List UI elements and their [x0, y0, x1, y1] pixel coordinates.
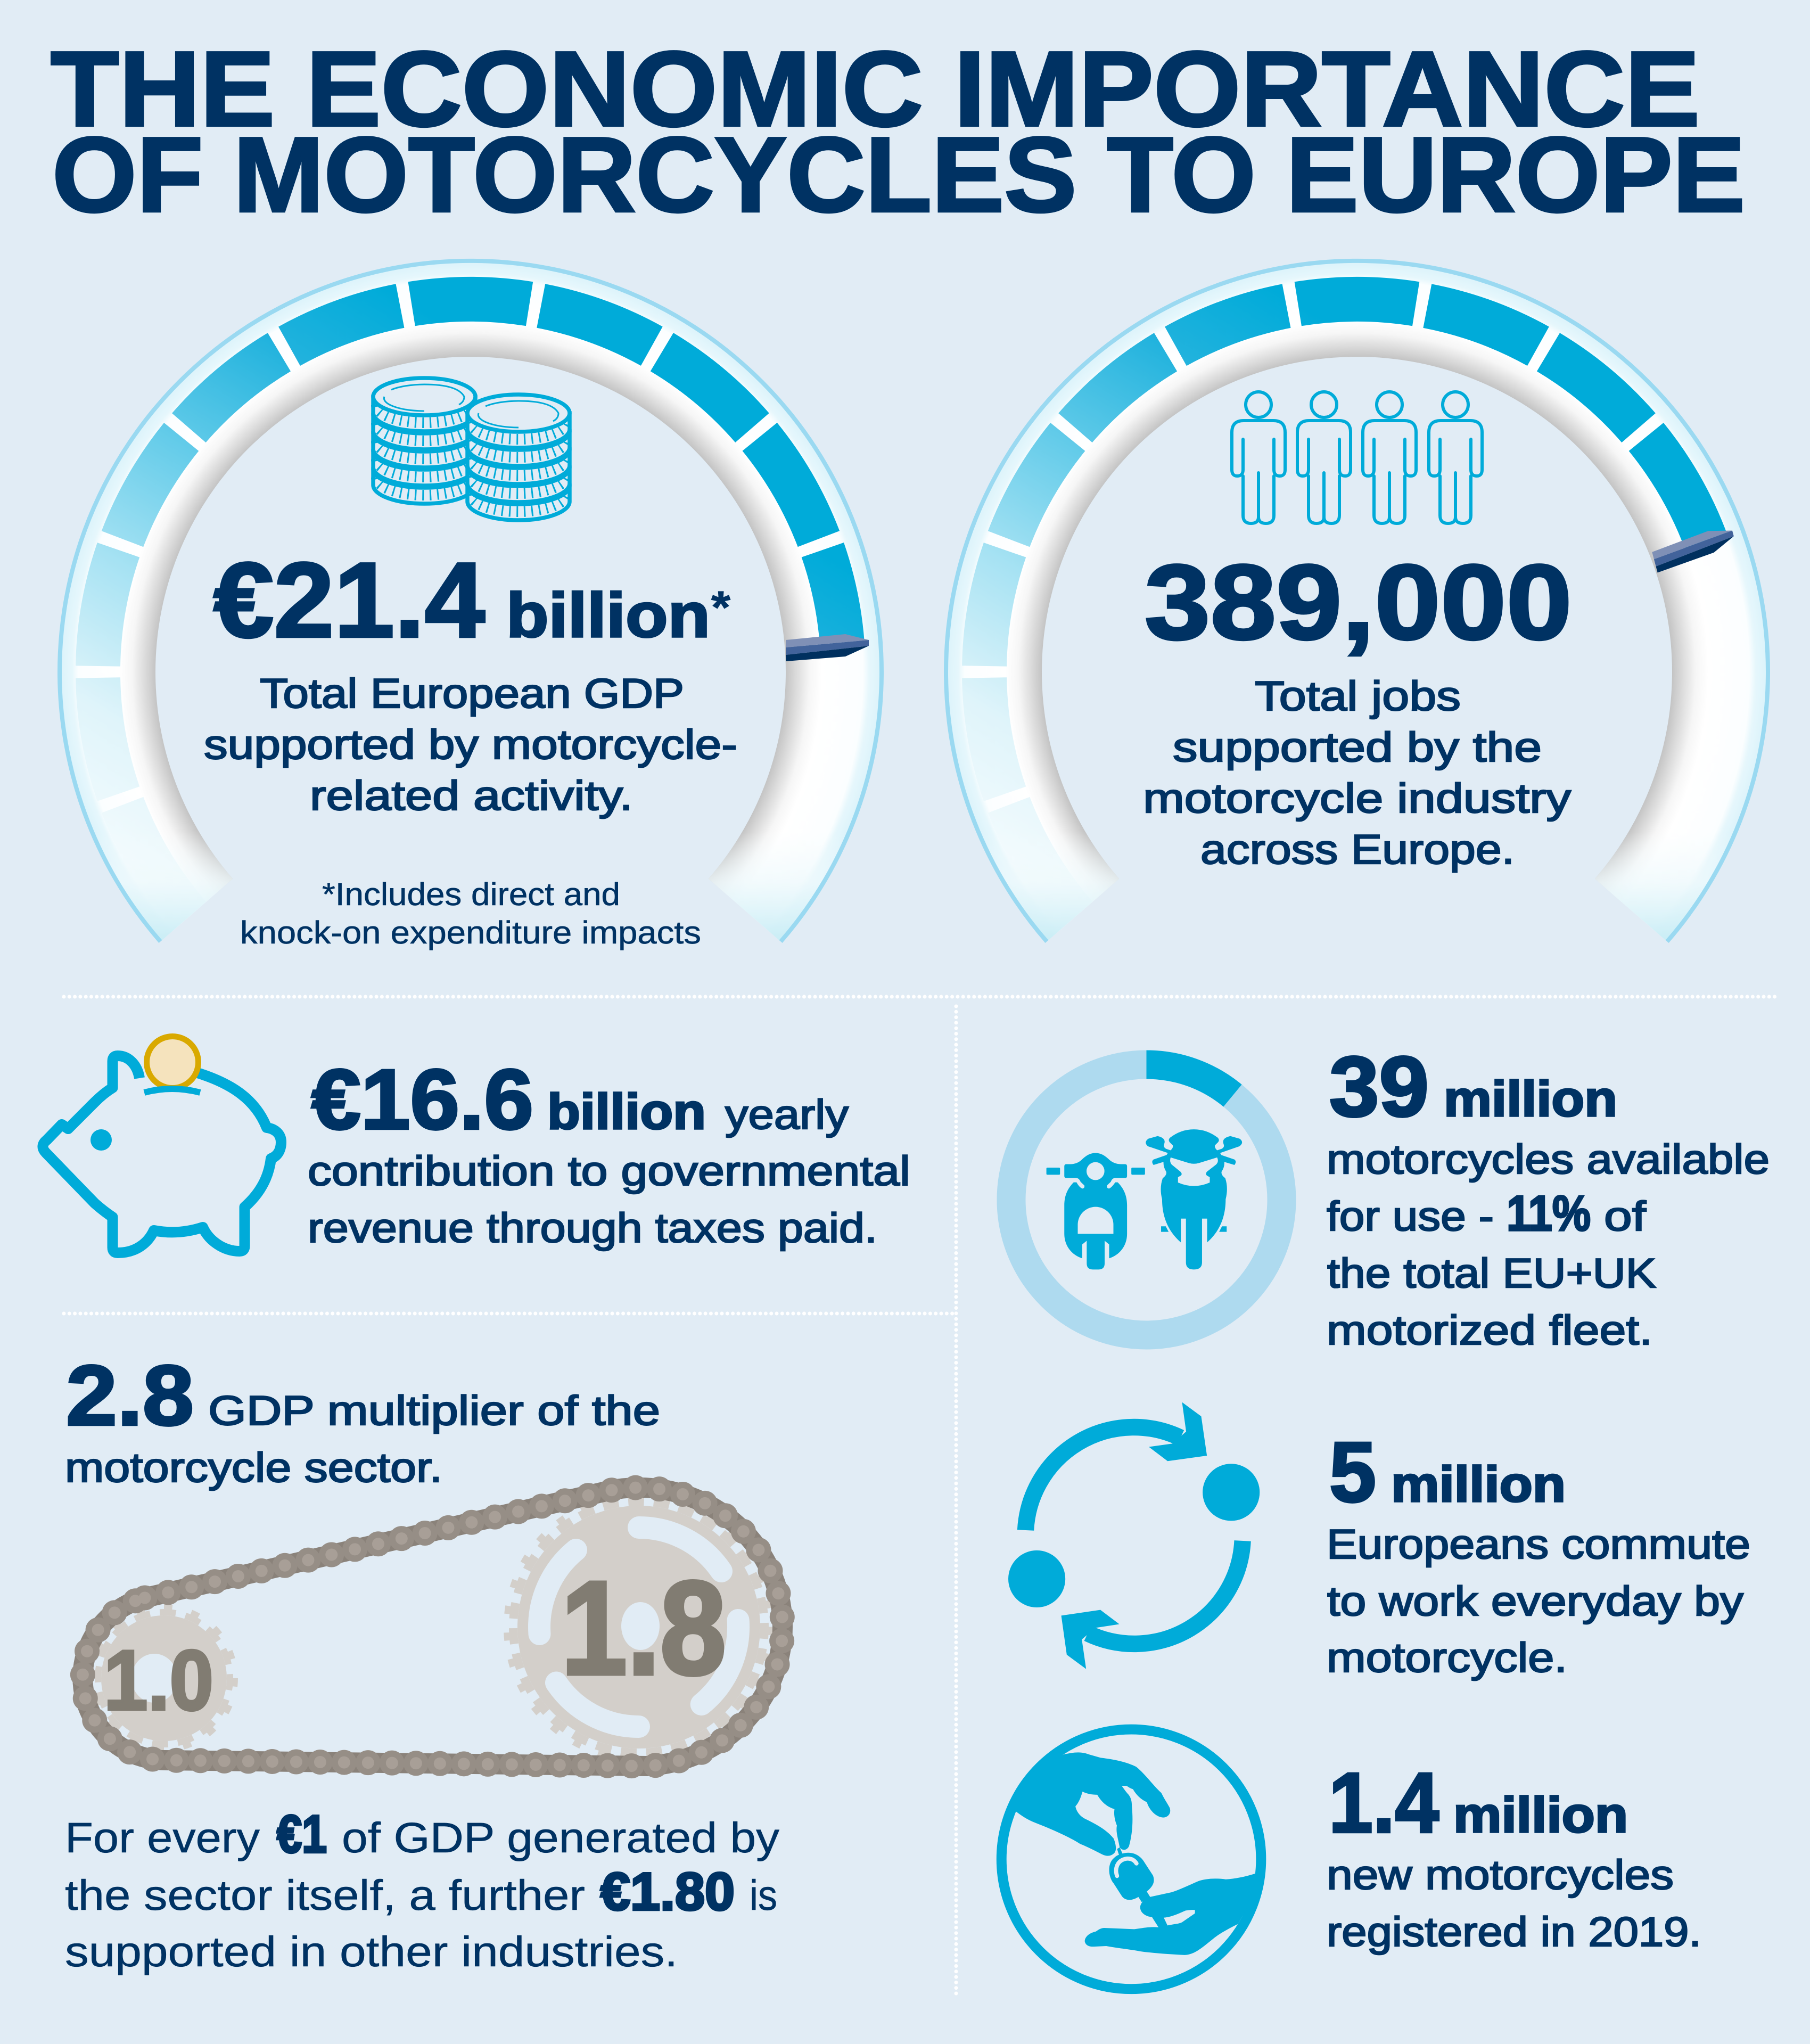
text: jobs description: [1143, 672, 1571, 873]
text: multiplier explanation: is: [750, 1871, 777, 1919]
text: GDP description: Total European GDP: [260, 670, 684, 717]
text: 5 million: million: [1391, 1456, 1566, 1512]
text: jobs description: supported by the: [1173, 724, 1542, 770]
panel: GDP multiplier: [65, 1348, 783, 1975]
gauge dial: GDP: [57, 259, 884, 943]
text: 39 million: motorized fleet.: [1327, 1307, 1652, 1353]
text: 5 million: to work everyday by: [1327, 1578, 1743, 1624]
text: 39 million: million: [1444, 1071, 1617, 1127]
text: 39 million: [1327, 1039, 1770, 1353]
text: tax figure: revenue through taxes paid.: [308, 1204, 877, 1251]
chart: 11 percent donut: [1011, 1065, 1282, 1335]
text: 5 million: Europeans commute: [1327, 1521, 1750, 1567]
text: multiplier explanation: €1: [277, 1804, 327, 1864]
panel: tax contribution: [43, 1036, 910, 1253]
text: tax figure: billion: [547, 1083, 706, 1139]
icon: coin stacks: [373, 378, 570, 520]
text: 1.4 million: [1327, 1755, 1701, 1955]
icon: hands passing key: [1001, 1729, 1261, 1989]
text: tax figure: contribution to governmental: [308, 1147, 910, 1194]
icon: piggy bank: [43, 1036, 281, 1253]
text: multiplier heading: 2.8: [66, 1348, 194, 1443]
text: GDP description: [204, 670, 737, 819]
text: multiplier explanation: For every: [65, 1814, 260, 1861]
icon: sprockets and chain: [83, 1488, 783, 1766]
text: 1.4 million: registered in 2019.: [1327, 1908, 1701, 1955]
icon: circular arrows and dots: [1008, 1402, 1260, 1669]
stat: 21.4 billion: €21.4: [213, 541, 485, 660]
title: THE ECONOMIC IMPORTANCE: [51, 30, 1700, 149]
text: 5 million: 5: [1329, 1424, 1376, 1520]
text: multiplier heading: GDP multiplier of the: [208, 1387, 660, 1434]
drive chain: [83, 1488, 783, 1766]
panel: commuters: [1008, 1402, 1750, 1681]
text: multiplier explanation: [65, 1804, 779, 1975]
stat: 389,000: 389,000: [1145, 543, 1572, 662]
text: jobs description: Total jobs: [1255, 672, 1461, 719]
large sprocket: [507, 1496, 770, 1759]
text: multiplier explanation: of GDP generated by: [342, 1814, 779, 1861]
text: 39 million: 39: [1329, 1039, 1429, 1134]
text: 39 million: the total EU+UK: [1327, 1250, 1656, 1296]
footnote: *Includes direct and: [322, 876, 620, 912]
text: 1.4 million: 1.4: [1329, 1755, 1439, 1850]
panel: new registrations: [1001, 1729, 1701, 1989]
stat: 21.4 billion: [213, 541, 731, 660]
text: 39 million: motorcycles available: [1327, 1136, 1770, 1183]
text: 39 million: for use -: [1327, 1193, 1494, 1239]
gauge dial: jobs: [944, 259, 1770, 943]
label: 1.8: 1.8: [561, 1554, 726, 1702]
footnote: knock-on expenditure impacts: [240, 915, 701, 950]
text: 5 million: motorcycle.: [1327, 1634, 1567, 1681]
text: tax figure: [308, 1052, 910, 1251]
stat: 21.4 billion: *: [711, 582, 731, 633]
text: multiplier explanation: supported in other industries.: [65, 1928, 678, 1975]
title: OF MOTORCYCLES TO EUROPE: [52, 116, 1745, 234]
footnote: [240, 876, 701, 950]
icon: four people: [1232, 392, 1482, 523]
stat: 21.4 billion: billion: [506, 580, 710, 651]
text: jobs description: motorcycle industry: [1143, 775, 1571, 822]
text: multiplier heading: motorcycle sector.: [65, 1444, 442, 1491]
text: tax figure: yearly: [725, 1091, 849, 1138]
small sprocket: [93, 1607, 235, 1750]
text: jobs description: across Europe.: [1200, 826, 1515, 873]
text: GDP description: related activity.: [310, 772, 633, 819]
text: 39 million: of: [1604, 1193, 1646, 1239]
text: multiplier heading: [65, 1348, 660, 1491]
panel: motorcycles available: [1011, 1039, 1770, 1353]
panel: GDP gauge: [57, 259, 884, 950]
text: 1.4 million: million: [1453, 1787, 1628, 1843]
text: 5 million: [1327, 1424, 1750, 1681]
text: 39 million: 11%: [1507, 1185, 1591, 1241]
text: GDP description: supported by motorcycle-: [204, 721, 737, 768]
text: 1.4 million: new motorcycles: [1327, 1851, 1674, 1898]
panel: jobs gauge: [944, 259, 1770, 943]
label: 1.0: 1.0: [104, 1632, 213, 1728]
text: tax figure: €16.6: [311, 1052, 533, 1147]
title: [51, 30, 1745, 234]
text: multiplier explanation: the sector itself, a further: [65, 1871, 585, 1919]
text: multiplier explanation: €1.80: [600, 1862, 735, 1922]
icon: scooter and motorcycle: [1047, 1129, 1242, 1269]
